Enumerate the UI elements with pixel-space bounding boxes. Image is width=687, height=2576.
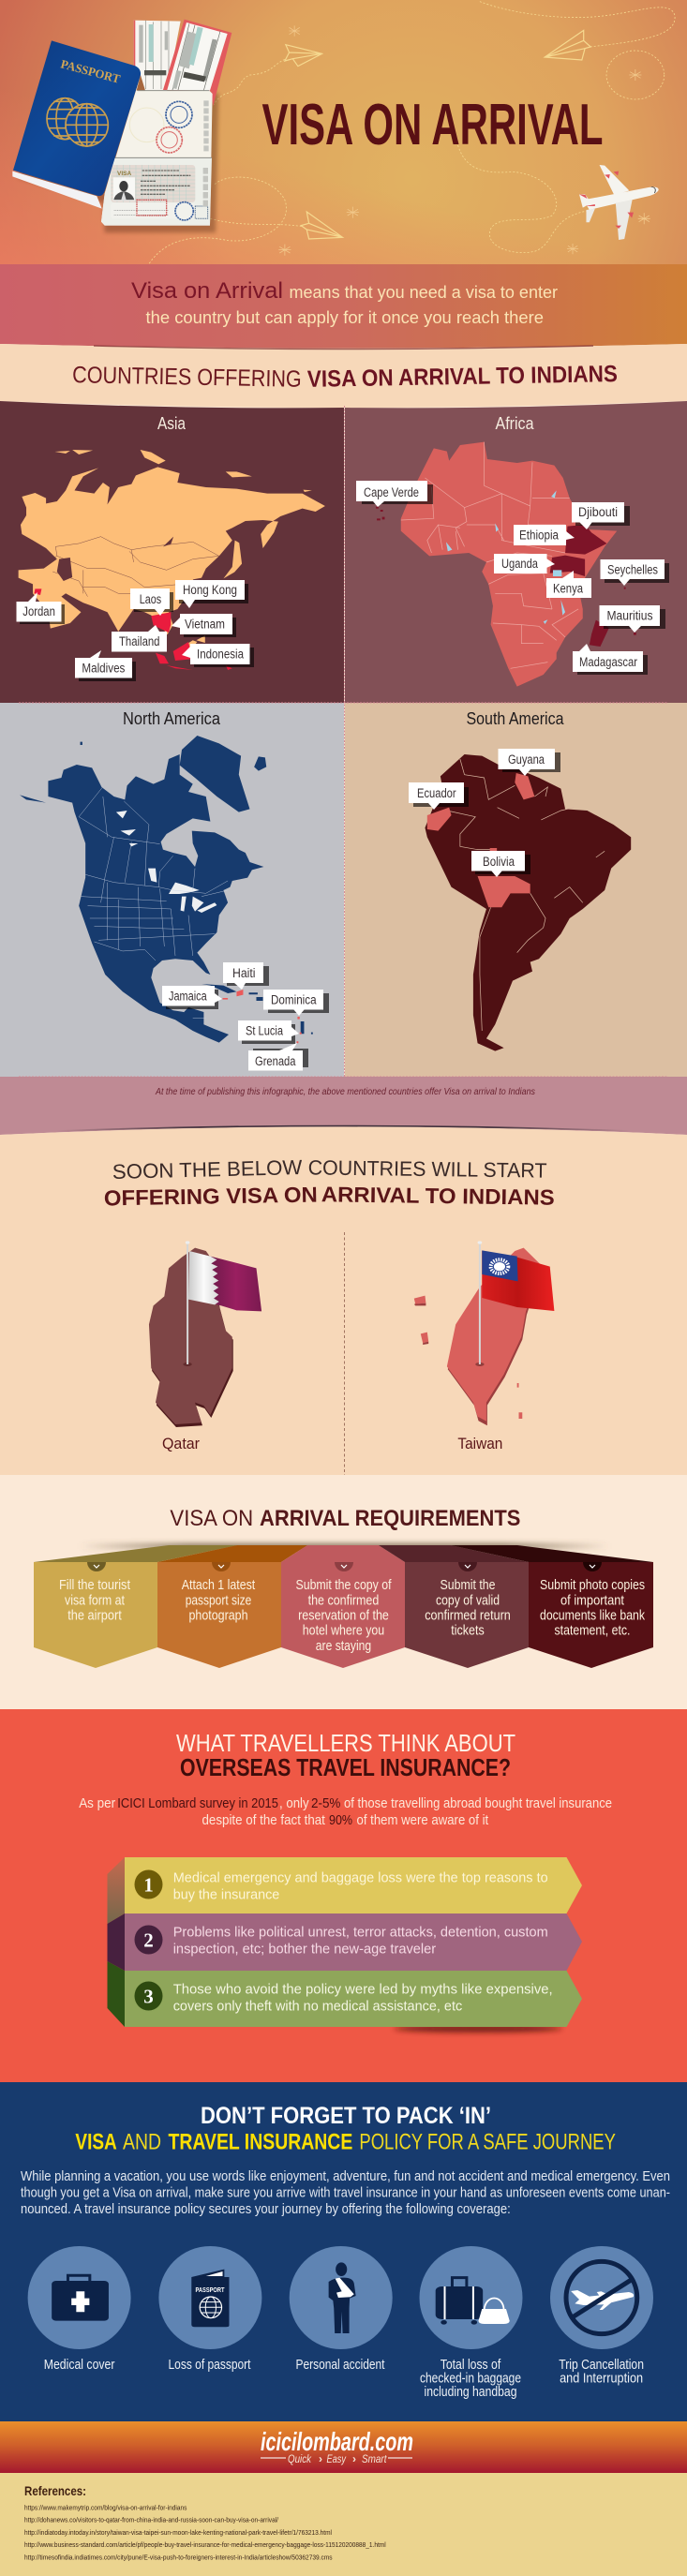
heading: travel insurance: WHAT TRAVELLERS THINK ABOUT (176, 1729, 515, 1757)
references: References: (24, 2483, 86, 2498)
heading: soon countries: OFFERING VISA ON (104, 1183, 318, 1210)
callout: indonesia (182, 644, 254, 667)
panel: north america (0, 703, 344, 1077)
requirement 4: copy of valid (436, 1593, 500, 1608)
ribbon 3: Those who avoid the policy were led by myths like expensive, (173, 1981, 553, 1998)
callout: thailand (112, 625, 167, 652)
heading: north america: North America (123, 709, 221, 728)
heading: travel insurance (176, 1729, 515, 1781)
map: asia (19, 450, 325, 670)
callout: madagascar: Madagascar (579, 655, 637, 669)
coverage: baggage: checked-in baggage (420, 2371, 521, 2386)
callout: madagascar (573, 644, 648, 675)
callout: mauritius (600, 605, 665, 633)
icon: no flights (566, 2261, 637, 2334)
callout: thailand: Thailand (119, 634, 159, 648)
requirement 1 (34, 1545, 237, 1668)
section: travel insurance (0, 1709, 687, 2082)
ribbon 1: Medical emergency and baggage loss were the top reasons to (173, 1870, 548, 1885)
requirement 3: Submit the copy of (296, 1578, 392, 1593)
survey text: of those travelling abroad bought travel insurance (344, 1796, 612, 1811)
heading: coverage (75, 2103, 616, 2155)
requirement 3: reservation of the (298, 1608, 389, 1623)
callout: guyana (499, 749, 560, 776)
section: countries heading: COUNTRIES OFFERING (72, 362, 302, 393)
panel: africa (345, 401, 687, 703)
icon: first aid kit (52, 2275, 109, 2321)
drop shadow (19, 44, 218, 232)
heading: coverage: TRAVEL INSURANCE (169, 2129, 352, 2155)
label: qatar: Qatar (162, 1435, 200, 1452)
footer: brand: Smart (362, 2452, 387, 2465)
callout: kenya (546, 571, 591, 598)
icon: airplane (579, 165, 659, 240)
callout: mauritius: Mauritius (607, 609, 653, 622)
requirement 2: passport size (186, 1593, 251, 1608)
callout: indonesia: Indonesia (197, 647, 244, 662)
header background (0, 0, 687, 265)
ribbon 1: buy the insurance (173, 1887, 279, 1902)
requirement 5 (451, 1545, 653, 1668)
callout: ethiopia (514, 525, 575, 545)
callout: vietnam (172, 614, 236, 637)
boarding ticket two (163, 20, 231, 106)
requirement 3: are staying (316, 1639, 371, 1654)
requirement 1: Fill the tourist (59, 1578, 130, 1593)
section: countries heading (0, 344, 687, 408)
callout: st lucia: St Lucia (246, 1023, 283, 1038)
callout: dominica: Dominica (271, 993, 317, 1006)
heading: soon countries: ARRIVAL TO INDIANS (321, 1182, 555, 1210)
map: africa (376, 442, 636, 687)
callout: seychelles: Seychelles (607, 562, 658, 577)
requirement 2 (157, 1545, 307, 1668)
requirement 4: tickets (451, 1623, 485, 1638)
section: upcoming countries (0, 1126, 687, 1475)
requirement 5: Submit photo copies (540, 1578, 645, 1593)
callout: vietnam: Vietnam (185, 617, 225, 632)
callout: jamaica: Jamaica (169, 990, 207, 1003)
requirement 5: statement, etc. (555, 1623, 630, 1638)
survey text: 90% (329, 1813, 352, 1828)
heading: coverage: DON’T FORGET TO PACK ‘IN’ (201, 2103, 491, 2129)
references: http://www.business-standard.com/article/pf/people-buy-travel-insurance-for-medical-emergency-baggage-loss-115120200888_1.html (24, 2542, 386, 2549)
icon: paper planes (285, 30, 590, 239)
references: http://timesofindia.indiatimes.com/city/pune/E-visa-push-to-foreigners-interest-in-India/articleshow/50362739.cms (24, 2554, 333, 2562)
references: https://www.makemytrip.com/blog/visa-on-arrival-for-indians (24, 2506, 187, 2511)
panel dividers (19, 406, 668, 1077)
requirement 3: the confirmed (308, 1593, 379, 1608)
references (0, 2473, 687, 2576)
coverage: baggage: including handbag (424, 2384, 517, 2400)
callout: uganda (494, 554, 555, 573)
heading: soon countries (104, 1155, 555, 1210)
coverage: loss of passport (158, 2246, 261, 2373)
heading: coverage: POLICY FOR A SAFE JOURNEY (359, 2129, 616, 2155)
requirement 3 (281, 1545, 405, 1668)
survey text: despite of the fact that (202, 1813, 325, 1828)
survey text: of them were aware of it (356, 1813, 488, 1828)
ribbon 3 (125, 1971, 582, 2027)
callout: bolivia: Bolivia (483, 855, 515, 869)
note band (0, 1077, 687, 1135)
ribbon folds (107, 1857, 125, 2027)
heading: requirements: VISA ON (170, 1506, 253, 1531)
footer: brand: › (352, 2452, 356, 2465)
callout: cape verde (356, 481, 433, 507)
ribbon 1 (125, 1857, 582, 1913)
ribbon 2: inspection, etc; bother the new-age traveler (173, 1942, 436, 1957)
map: south america (425, 754, 631, 1051)
ribbon 2 (125, 1913, 582, 1971)
coverage paragraph (21, 2168, 670, 2217)
callout: seychelles (600, 559, 669, 586)
heading: travel insurance: OVERSEAS TRAVEL INSURANCE? (180, 1753, 511, 1781)
callout: bolivia (471, 851, 530, 877)
footer: brand: Easy (326, 2452, 347, 2465)
survey text: As per (79, 1796, 115, 1811)
callout: uganda: Uganda (501, 557, 538, 571)
callout: dominica (263, 990, 329, 1016)
ribbon 1: 1 (143, 1874, 154, 1897)
map: qatar with flag (149, 1241, 261, 1427)
panel: asia (0, 401, 344, 703)
decorative flight paths (149, 2, 675, 264)
section: countries heading: VISA ON ARRIVAL TO INDIANS (307, 361, 618, 393)
requirement 2: Attach 1 latest (182, 1578, 255, 1593)
callout: maldives (75, 650, 136, 681)
decorative stars (278, 25, 650, 256)
coverage: trip cancellation: Trip Cancellation (559, 2357, 644, 2373)
survey text (79, 1796, 612, 1828)
boarding ticket one (134, 21, 181, 91)
footer: brand: icicilombard.com (261, 2427, 413, 2456)
callout: haiti (223, 962, 269, 990)
section: coverage (0, 2082, 687, 2421)
band: definition: Visa on Arrival (131, 278, 283, 304)
coverage: baggage: Total loss of (441, 2357, 501, 2373)
callout: maldives: Maldives (82, 662, 126, 675)
survey text: 2-5% (311, 1796, 340, 1811)
requirement 5: of important (560, 1593, 624, 1608)
references: http://dohanews.co/visitors-to-qatar-from-china-india-and-russia-soon-can-buy-visa-on-arrival/ (24, 2517, 278, 2524)
requirement 4 (379, 1545, 529, 1668)
heading: coverage: VISA (75, 2129, 117, 2155)
survey text: , only (279, 1796, 309, 1811)
footer: brand: › (319, 2452, 322, 2465)
passport cover (12, 40, 141, 209)
map: taiwan with flag (414, 1241, 554, 1425)
band: definition (0, 264, 687, 349)
callout: djibouti (572, 502, 630, 529)
note band: At the time of publishing this infographic, the above mentioned countries offer Visa on arrival to Indians (155, 1086, 536, 1097)
callout: st lucia (238, 1020, 299, 1044)
callout: grenada (248, 1043, 308, 1070)
callout: grenada: Grenada (255, 1054, 296, 1068)
callout: ecuador (409, 782, 469, 810)
coverage: trip cancellation: and Interruption (560, 2371, 643, 2386)
heading: coverage: AND (123, 2129, 161, 2155)
requirement 5: documents like bank (540, 1608, 646, 1623)
visa page booklet (101, 75, 213, 226)
coverage: medical cover (28, 2246, 131, 2373)
coverage paragraph: nounced. A travel insurance policy secures your journey by offering the following coverage: (21, 2201, 511, 2217)
callout: jordan (17, 592, 65, 624)
callout: cape verde: Cape Verde (364, 485, 419, 499)
callout: haiti: Haiti (232, 966, 255, 980)
icon: luggage and handbag (436, 2278, 510, 2325)
requirement 4: Submit the (441, 1578, 495, 1593)
callout: jamaica (162, 986, 222, 1009)
band: definition: means that you need a visa to enter (289, 282, 558, 302)
icon: injured person (329, 2262, 356, 2333)
ribbon 3: covers only theft with no medical assistance, etc (173, 1998, 463, 2015)
requirement 1: the airport (67, 1608, 122, 1623)
coverage: personal accident: Personal accident (296, 2357, 385, 2373)
callout: guyana: Guyana (508, 752, 545, 767)
callout: ecuador: Ecuador (417, 786, 456, 800)
map: north america (20, 736, 313, 1043)
visa page text: VISA (117, 171, 131, 177)
requirement 2: photograph (189, 1608, 247, 1623)
section: requirements (0, 1475, 687, 1709)
coverage: medical cover: Medical cover (44, 2357, 114, 2373)
heading: soon countries: SOON THE BELOW (112, 1155, 303, 1184)
ribbon 2: Problems like political unrest, terror attacks, detention, custom (173, 1925, 548, 1940)
callout: jordan: Jordan (22, 604, 55, 618)
label: taiwan: Taiwan (457, 1435, 502, 1452)
heading: africa: Africa (495, 414, 534, 433)
callout: laos (130, 588, 173, 616)
callout: kenya: Kenya (553, 581, 583, 596)
references: http://indiatoday.intoday.in/story/taiwan-visa-taipei-sun-moon-lake-kenting-national-park-travel-lifetr/1/763213.html (24, 2530, 332, 2537)
panel: south america (345, 703, 687, 1077)
heading: asia: Asia (157, 414, 187, 433)
coverage: trip cancellation (550, 2246, 653, 2386)
callout: hong kong (175, 580, 248, 608)
coverage: baggage (420, 2246, 523, 2400)
callout: djibouti: Djibouti (578, 505, 618, 519)
band: definition: the country but can apply for it once you reach there (146, 307, 544, 327)
callout: hong kong: Hong Kong (183, 583, 237, 597)
ribbon 2: 2 (143, 1928, 154, 1951)
footer: brand (0, 2421, 687, 2473)
coverage: loss of passport: PASSPORT (195, 2287, 225, 2294)
survey text: ICICI Lombard survey in 2015 (117, 1796, 278, 1811)
callout: laos: Laos (140, 592, 161, 606)
coverage: loss of passport: Loss of passport (169, 2357, 251, 2373)
footer: brand: Quick (288, 2452, 312, 2465)
passport cover text: PASSPORT (59, 56, 122, 86)
heading: requirements (170, 1506, 520, 1531)
requirement 4: confirmed return (425, 1608, 511, 1623)
callout: ethiopia: Ethiopia (519, 529, 559, 542)
heading: soon countries: COUNTRIES WILL START (308, 1155, 547, 1183)
icon: passport and boarding tickets (12, 20, 231, 232)
requirement 3: hotel where you (303, 1623, 384, 1638)
ribbon 3: 3 (143, 1985, 154, 2007)
heading: south america: South America (467, 709, 564, 728)
requirement 1: visa form at (65, 1593, 125, 1608)
heading: requirements: ARRIVAL REQUIREMENTS (260, 1506, 520, 1531)
coverage: personal accident (290, 2246, 393, 2373)
icon: passport (191, 2270, 230, 2327)
